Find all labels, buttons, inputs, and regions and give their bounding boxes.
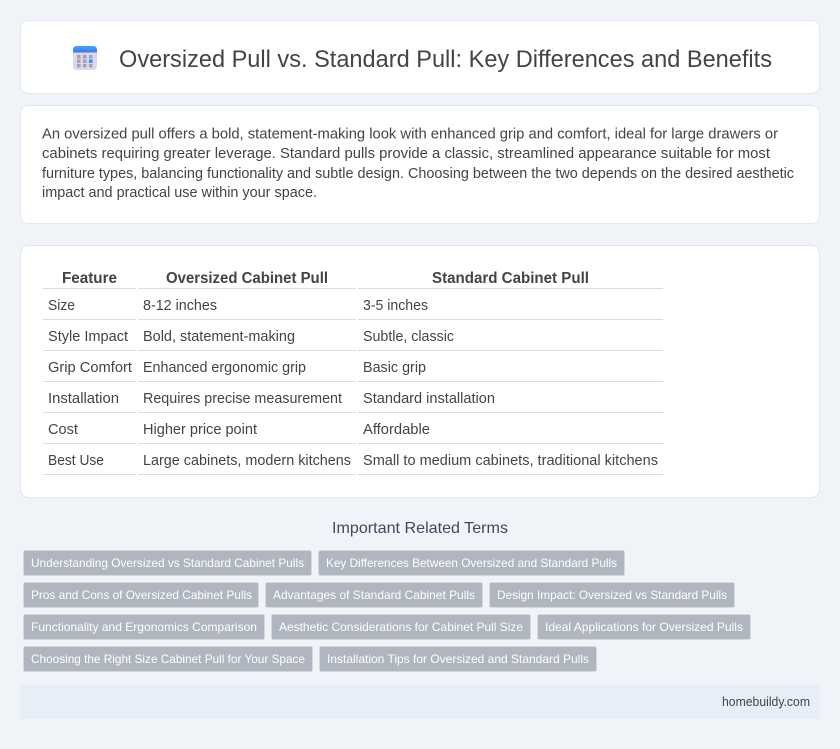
panel: comparison table bbox=[20, 246, 820, 498]
row: best use: Small to medium cabinets, traditional kitchens bbox=[363, 453, 658, 469]
row: installation bbox=[48, 391, 495, 407]
row: best use: Best Use bbox=[48, 453, 104, 469]
footer site name: homebuildy.com bbox=[722, 695, 810, 709]
tag: Functionality and Ergonomics Comparison bbox=[31, 620, 257, 634]
heading: important related terms: Important Related Terms bbox=[332, 520, 508, 537]
tag: Key Differences Between Oversized and Standard Pulls bbox=[326, 556, 617, 570]
tag bbox=[24, 582, 258, 608]
tag: Design Impact: Oversized vs Standard Pulls bbox=[497, 588, 727, 602]
row: grip comfort bbox=[48, 360, 426, 376]
row: grip comfort: Grip Comfort bbox=[48, 360, 132, 376]
intro paragraph: furniture types, balancing functionality and subtle design. Choosing between the two depends on the desired aesthetic bbox=[42, 166, 794, 182]
tag bbox=[318, 550, 624, 576]
row: size bbox=[48, 298, 428, 314]
tag bbox=[538, 614, 750, 640]
tag bbox=[266, 582, 482, 608]
row: best use bbox=[48, 453, 658, 469]
tag: Advantages of Standard Cabinet Pulls bbox=[273, 588, 475, 602]
row: installation: Requires precise measurement bbox=[143, 391, 342, 407]
row: grip comfort: Enhanced ergonomic grip bbox=[143, 360, 306, 376]
table header: Feature bbox=[62, 270, 117, 287]
tag: Aesthetic Considerations for Cabinet Pull Size bbox=[279, 620, 523, 634]
header panel bbox=[20, 20, 820, 94]
row: size: 3-5 inches bbox=[363, 298, 428, 314]
table header bbox=[62, 270, 589, 287]
table header: Oversized Cabinet Pull bbox=[166, 270, 328, 287]
intro paragraph: cabinets requiring greater leverage. Standard pulls provide a classic, streamlined appearance suitable for most bbox=[42, 146, 770, 162]
icon: calendar bbox=[73, 46, 97, 70]
tag: Choosing the Right Size Cabinet Pull for Your Space bbox=[31, 652, 305, 666]
row: size: Size bbox=[48, 298, 75, 314]
tag: Pros and Cons of Oversized Cabinet Pulls bbox=[31, 588, 252, 602]
row: style impact: Subtle, classic bbox=[363, 329, 454, 345]
row: grip comfort: Basic grip bbox=[363, 360, 426, 376]
row: installation: Installation bbox=[48, 391, 119, 407]
panel: introduction bbox=[20, 106, 820, 224]
tag bbox=[490, 582, 734, 608]
tag: Ideal Applications for Oversized Pulls bbox=[545, 620, 743, 634]
intro paragraph: An oversized pull offers a bold, statement-making look with enhanced grip and comfort, ideal for large drawers or bbox=[42, 126, 778, 142]
tag bbox=[24, 550, 312, 576]
tag bbox=[24, 646, 312, 672]
row: cost: Cost bbox=[48, 422, 78, 438]
related term tags bbox=[24, 550, 750, 672]
row: cost bbox=[48, 422, 430, 438]
row: installation: Standard installation bbox=[363, 391, 495, 407]
tag bbox=[320, 646, 596, 672]
intro paragraph bbox=[42, 126, 794, 201]
table header: Standard Cabinet Pull bbox=[432, 270, 589, 287]
row: style impact: Bold, statement-making bbox=[143, 329, 295, 345]
row: best use: Large cabinets, modern kitchens bbox=[143, 453, 351, 469]
tag: Installation Tips for Oversized and Standard Pulls bbox=[327, 652, 589, 666]
row: size: 8-12 inches bbox=[143, 298, 217, 314]
tag bbox=[24, 614, 264, 640]
tag bbox=[272, 614, 530, 640]
title: Oversized Pull vs. Standard Pull: Key Differences and Benefits bbox=[119, 46, 772, 73]
row: style impact: Style Impact bbox=[48, 329, 128, 345]
tag: Understanding Oversized vs Standard Cabinet Pulls bbox=[31, 556, 304, 570]
row: cost: Affordable bbox=[363, 422, 430, 438]
footer bbox=[20, 685, 820, 719]
row: cost: Higher price point bbox=[143, 422, 257, 438]
intro paragraph: impact and practical use within your space. bbox=[42, 185, 317, 201]
row: style impact bbox=[48, 329, 454, 345]
